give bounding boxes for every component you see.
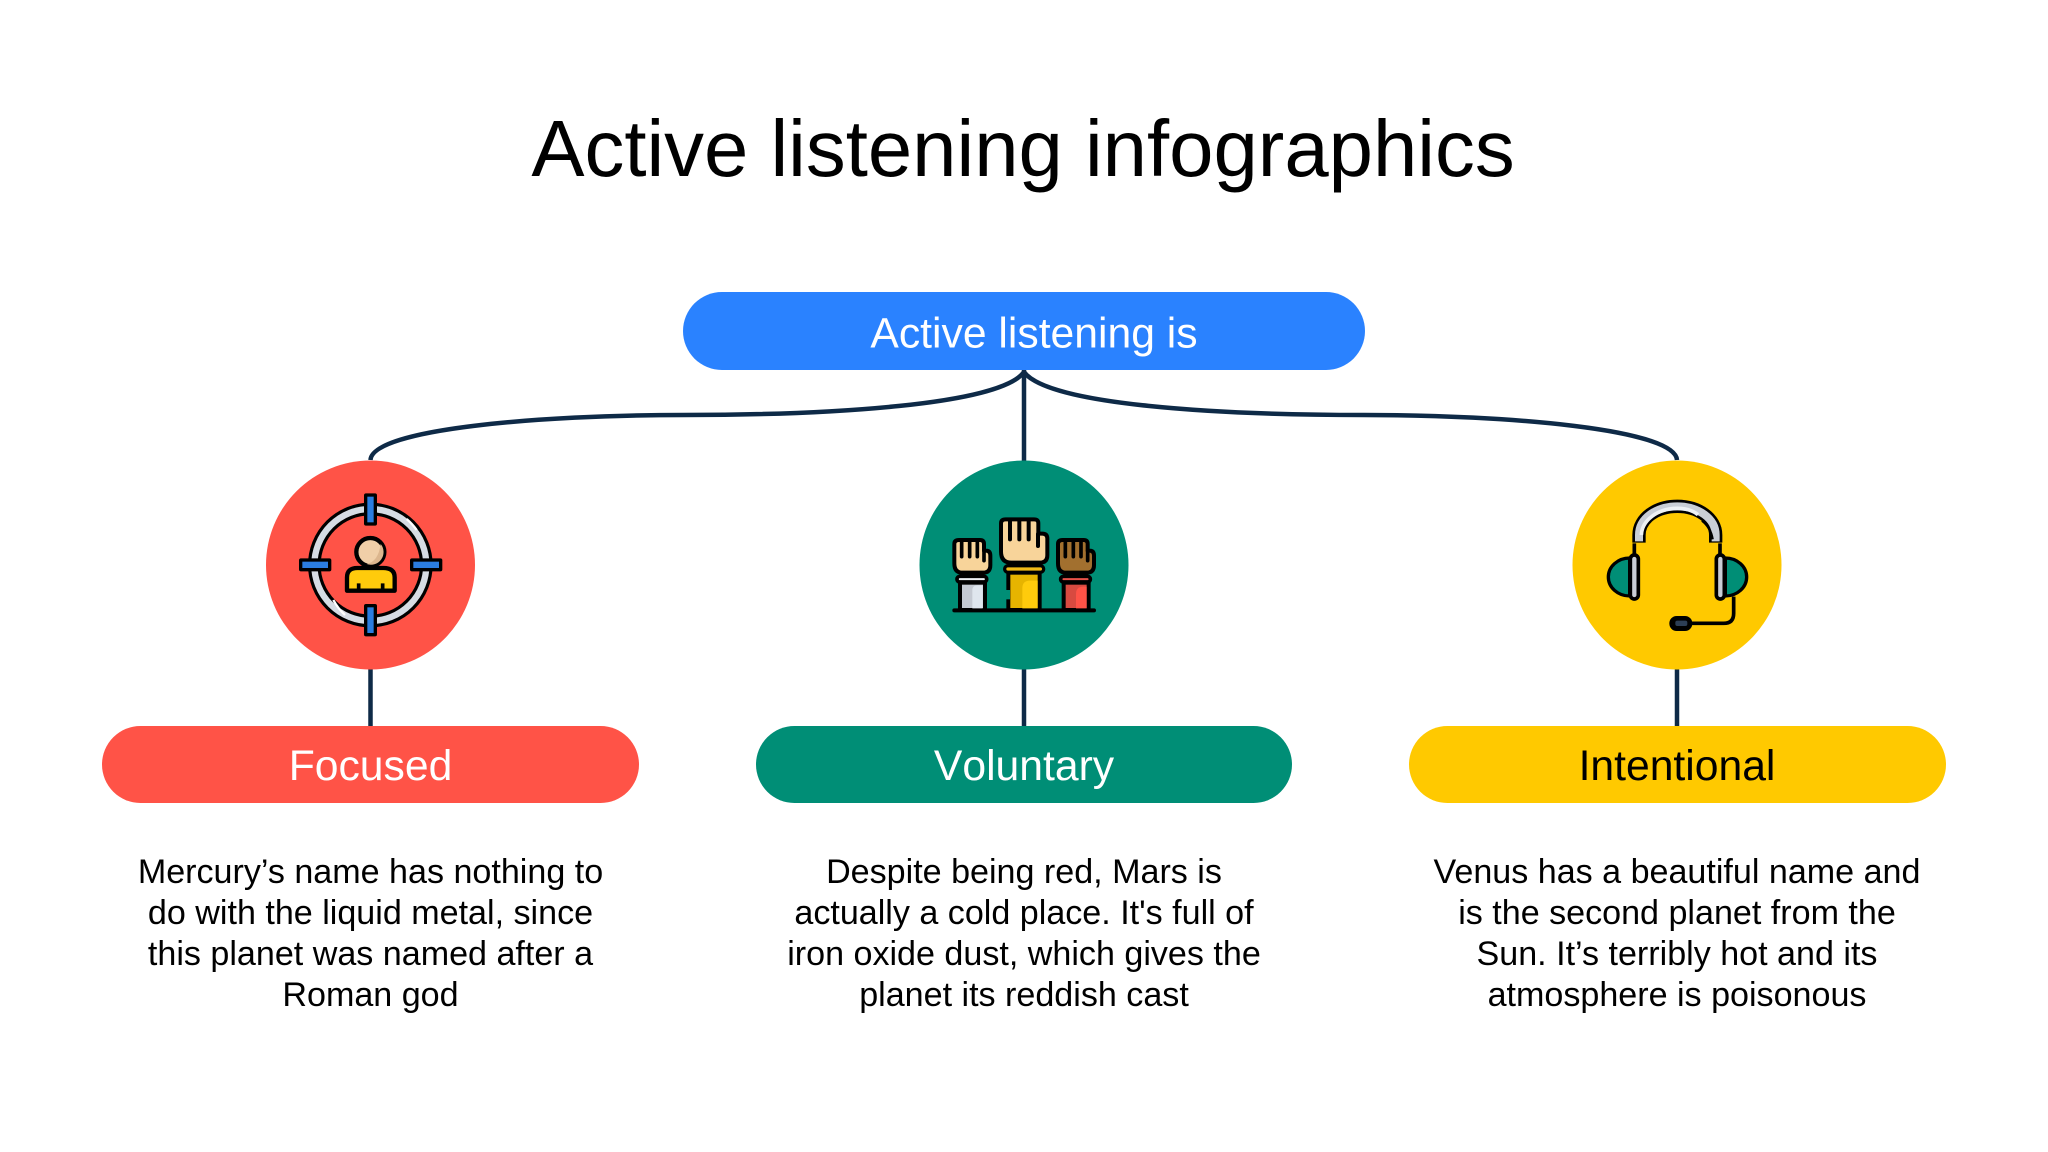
text block: Intentional: Sun. It’s terribly hot and its xyxy=(1477,935,1877,973)
label pill: Voluntary: Voluntary xyxy=(934,742,1115,790)
text block: Intentional xyxy=(1434,853,1920,1014)
top pill: Active listening is: Active listening is xyxy=(870,310,1198,358)
text block: Voluntary: planet its reddish cast xyxy=(859,976,1189,1014)
text block: Intentional: atmosphere is poisonous xyxy=(1488,976,1866,1014)
icon circle: headset xyxy=(1572,460,1782,670)
top pill: Active listening is xyxy=(683,292,1365,370)
text block: Focused xyxy=(138,853,603,1014)
icon circle: raised fists xyxy=(920,460,1128,670)
label pill: Voluntary xyxy=(756,726,1292,803)
icon circle: target on person xyxy=(266,460,475,670)
text block: Intentional: is the second planet from the xyxy=(1458,894,1896,932)
label pill: Focused: Focused xyxy=(289,742,452,790)
text block: Focused: do with the liquid metal, since xyxy=(148,894,593,932)
text block: Voluntary: iron oxide dust, which gives the xyxy=(787,935,1261,973)
panel: Focused xyxy=(102,460,639,1014)
text block: Voluntary xyxy=(787,853,1261,1014)
title: Active listening infographics xyxy=(531,104,1515,193)
connector lines xyxy=(370,370,1677,727)
label pill: Intentional xyxy=(1409,726,1946,803)
text block: Focused: this planet was named after a xyxy=(148,935,593,973)
panel: Intentional xyxy=(1409,460,1946,1014)
label pill: Intentional: Intentional xyxy=(1579,742,1775,790)
label pill: Focused xyxy=(102,726,639,803)
text block: Focused: Mercury’s name has nothing to xyxy=(138,853,603,891)
text block: Focused: Roman god xyxy=(282,976,459,1014)
text block: Voluntary: actually a cold place. It's full of xyxy=(794,894,1254,932)
text block: Intentional: Venus has a beautiful name and xyxy=(1434,853,1920,891)
panel: Voluntary xyxy=(756,460,1292,1014)
text block: Voluntary: Despite being red, Mars is xyxy=(826,853,1222,891)
